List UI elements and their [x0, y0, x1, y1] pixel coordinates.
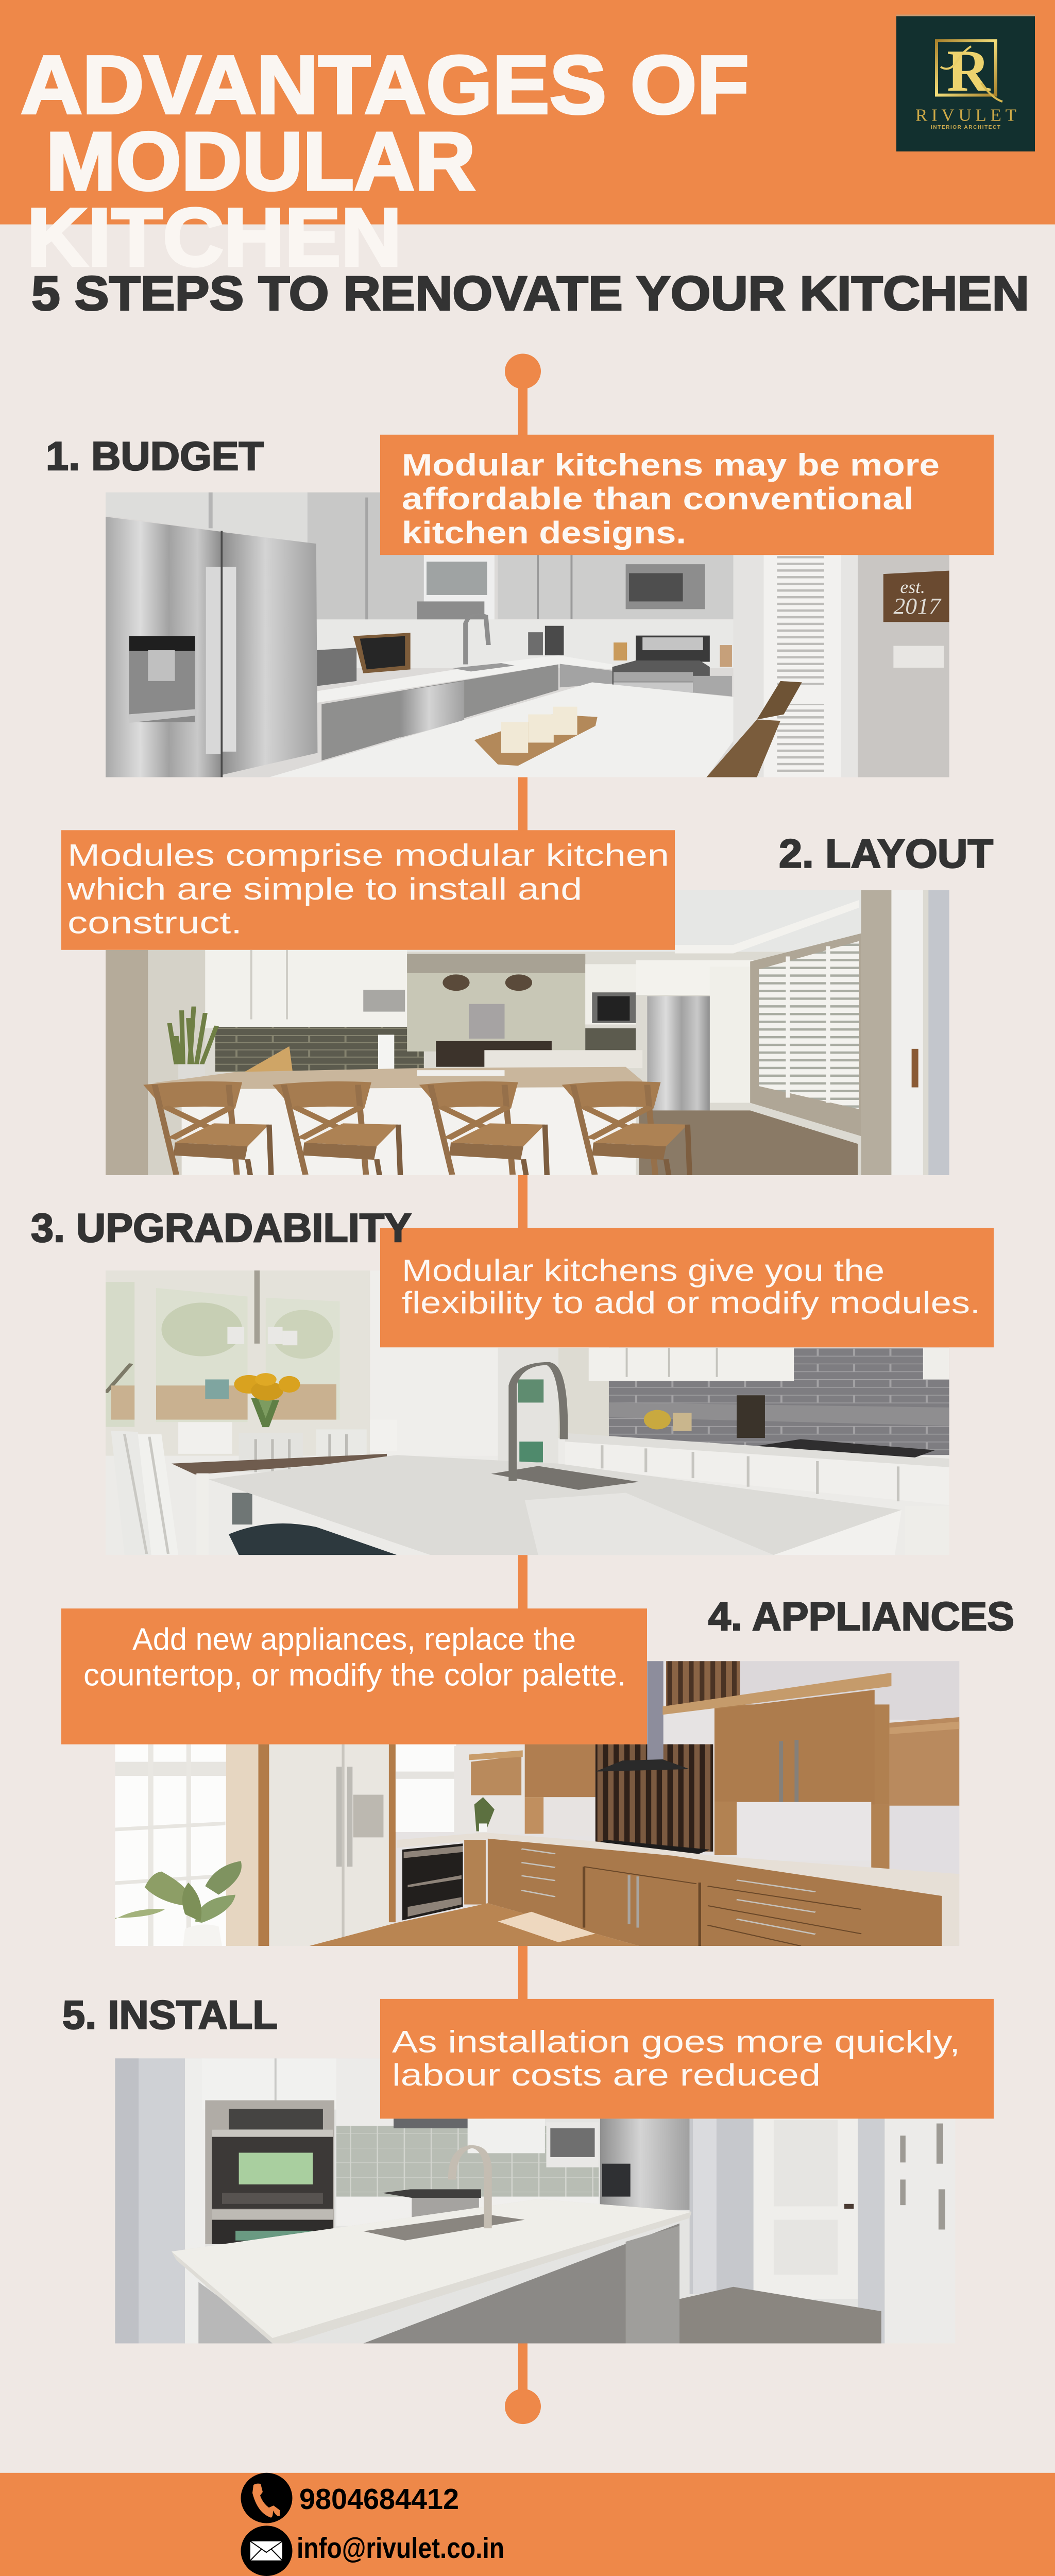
logo: Rivulet Interior Architect: INTERIOR ARCHITECT: [931, 125, 1000, 130]
callout 3: upgradability text: [380, 1228, 994, 1347]
callout 5: install text: [380, 1999, 994, 2119]
callout 5: install text: labour costs are reduced: [392, 2058, 821, 2092]
footer band: [0, 2473, 1055, 2576]
logo: Rivulet Interior Architect: R: [947, 38, 991, 104]
heading: 5 steps: 5 STEPS TO RENOVATE YOUR KITCHEN: [31, 267, 1029, 320]
title: KITCHEN: [27, 191, 402, 283]
callout 3: upgradability text: Modular kitchens give you the: [402, 1253, 884, 1287]
photo 1: grey kitchen with steel fridge: est.: [900, 577, 925, 597]
step label 5: 5. INSTALL: [62, 1992, 278, 2037]
timeline connector: [505, 354, 541, 2424]
callout 2: layout text: [61, 830, 675, 950]
callout 2: layout text: construct.: [67, 905, 242, 940]
callout 5: install text: As installation goes more quickly,: [392, 2024, 960, 2059]
photo 5: white kitchen with double ovens: [115, 2058, 956, 2344]
phone number: 9804684412: [299, 2483, 459, 2516]
callout 3: upgradability text: flexibility to add or modify modules.: [402, 1285, 980, 1320]
title: [21, 39, 749, 283]
title: MODULAR: [46, 115, 475, 208]
callout 1: budget text: [380, 435, 994, 555]
callout 2: layout text: Modules comprise modular kitchen: [67, 838, 669, 873]
callout 1: budget text: kitchen designs.: [402, 515, 686, 550]
callout 4: appliances text: [61, 1608, 647, 1744]
step label 1: 1. BUDGET: [46, 433, 264, 479]
logo: Rivulet Interior Architect: RIVULET: [915, 106, 1016, 125]
callout 4: appliances text: countertop, or modify the color palette.: [83, 1657, 626, 1692]
callout 2: layout text: which are simple to install and: [67, 872, 582, 906]
callout 4: appliances text: Add new appliances, replace the: [132, 1622, 576, 1656]
photo 4: wooden kitchen with slatted wall: [115, 1661, 959, 1946]
logo: Rivulet Interior Architect: [896, 14, 1035, 151]
title: ADVANTAGES OF: [21, 39, 749, 131]
email address: info@rivulet.co.in: [297, 2532, 504, 2565]
photo 1: grey kitchen with steel fridge: [106, 493, 949, 777]
photo 3: bright kitchen with island and dining area: [106, 1270, 949, 1555]
step label 2: 2. LAYOUT: [779, 831, 993, 876]
photo 1: grey kitchen with steel fridge: 2017: [893, 593, 942, 619]
icon: phone: [241, 2473, 293, 2523]
photo 2: white kitchen with wooden stools: [106, 890, 949, 1175]
callout 1: budget text: Modular kitchens may be more: [402, 448, 940, 482]
header band: [0, 0, 1055, 225]
step label 3: 3. UPGRADABILITY: [31, 1205, 412, 1250]
step label 4: 4. APPLIANCES: [708, 1594, 1014, 1639]
callout 1: budget text: affordable than conventional: [402, 481, 914, 516]
icon: envelope: [241, 2526, 293, 2576]
